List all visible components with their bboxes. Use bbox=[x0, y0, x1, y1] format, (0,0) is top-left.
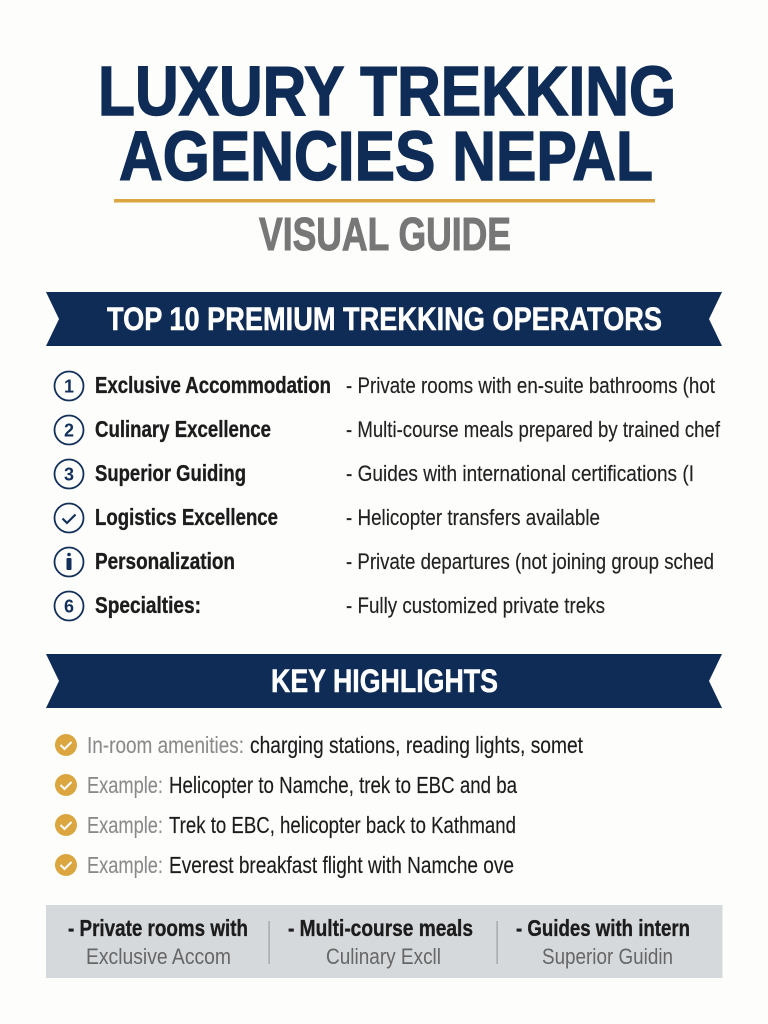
list row 5 bbox=[54, 548, 714, 576]
summary column 1 bbox=[68, 915, 248, 969]
panel: summary strip bbox=[46, 905, 722, 978]
highlight 3 bbox=[55, 812, 516, 838]
list row 1: - Private rooms with en-suite bathrooms (hot bbox=[346, 373, 715, 398]
list row 4: - Helicopter transfers available bbox=[346, 505, 600, 530]
summary column 2 bbox=[288, 915, 473, 969]
list row 4 bbox=[54, 504, 600, 532]
list row 6: 6 bbox=[64, 596, 74, 616]
panel: top 10 operators banner bbox=[46, 292, 722, 346]
highlight 1 bbox=[55, 732, 584, 758]
list row 1 bbox=[54, 372, 715, 400]
highlight 1: charging stations, reading lights, somet bbox=[250, 732, 584, 758]
panel: highlights list bbox=[55, 732, 584, 878]
panel: top 10 operators banner: TOP 10 PREMIUM TREKKING OPERATORS bbox=[107, 301, 662, 337]
title bbox=[98, 52, 676, 195]
list row 6: - Fully customized private treks bbox=[346, 593, 605, 618]
subtitle: VISUAL GUIDE bbox=[259, 208, 511, 260]
highlight 4: Example: bbox=[87, 852, 163, 878]
highlight 2 bbox=[55, 772, 517, 798]
highlight 4 bbox=[55, 852, 514, 878]
list row 3 bbox=[54, 460, 694, 488]
panel: key highlights banner: KEY HIGHLIGHTS bbox=[271, 663, 498, 699]
list row 6 bbox=[54, 592, 605, 620]
panel: key highlights banner bbox=[46, 654, 722, 708]
list row 6: Specialties: bbox=[95, 592, 201, 618]
list row 5: Personalization bbox=[95, 548, 235, 574]
summary column 1: Exclusive Accom bbox=[86, 944, 231, 969]
list row 3: - Guides with international certifications (I bbox=[346, 461, 694, 486]
title: AGENCIES NEPAL bbox=[119, 117, 653, 195]
summary column 3 bbox=[516, 915, 690, 969]
highlight 3: Example: bbox=[87, 812, 163, 838]
highlight 4: Everest breakfast flight with Namche ove bbox=[169, 852, 514, 878]
list row 1: Exclusive Accommodation bbox=[95, 372, 331, 398]
list row 2: Culinary Excellence bbox=[95, 416, 271, 442]
highlight 2: Helicopter to Namche, trek to EBC and ba bbox=[169, 772, 517, 798]
list row 3: Superior Guiding bbox=[95, 460, 246, 486]
summary column 1: - Private rooms with bbox=[68, 915, 248, 941]
highlight 3: Trek to EBC, helicopter back to Kathmand bbox=[169, 812, 516, 838]
list row 3: 3 bbox=[64, 464, 74, 484]
gold title underline bbox=[114, 199, 655, 202]
highlight 1: In-room amenities: bbox=[87, 732, 244, 758]
highlight 2: Example: bbox=[87, 772, 163, 798]
summary column 3: Superior Guidin bbox=[542, 944, 673, 969]
list row 2 bbox=[54, 416, 721, 444]
list row 5: - Private departures (not joining group sched bbox=[346, 549, 714, 574]
summary column 2: Culinary Excll bbox=[326, 944, 441, 969]
list row 2: 2 bbox=[64, 420, 74, 440]
title: LUXURY TREKKING bbox=[98, 52, 676, 130]
panel: operators list bbox=[54, 372, 721, 620]
list row 1: 1 bbox=[64, 376, 74, 396]
summary column 3: - Guides with intern bbox=[516, 915, 690, 941]
list row 4: Logistics Excellence bbox=[95, 504, 278, 530]
summary column 2: - Multi-course meals bbox=[288, 915, 473, 941]
